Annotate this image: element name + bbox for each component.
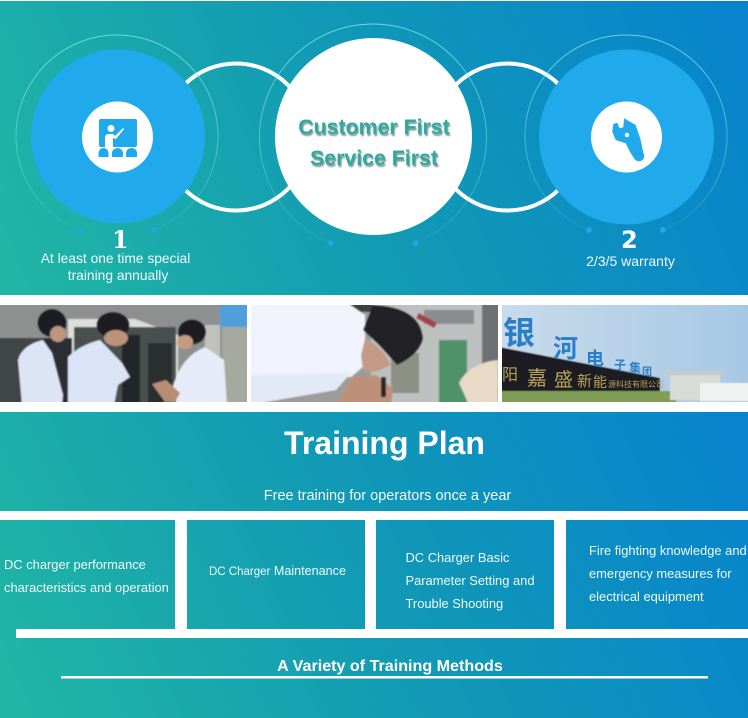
box text: performance: characteristics and operation xyxy=(4,580,169,595)
box text: fire fighting: Fire fighting knowledge and xyxy=(589,543,747,558)
thin orbit rings xyxy=(16,24,727,243)
icon: wrench xyxy=(591,102,662,172)
sign characters: 团 xyxy=(642,363,652,378)
gold slogan: 新 xyxy=(577,370,592,391)
box text: parameter setting: Trouble Shooting xyxy=(406,596,503,611)
blue circle right xyxy=(539,50,714,224)
text: training annually: training annually xyxy=(68,268,168,283)
gold slogan: 能 xyxy=(593,372,607,392)
number 1: 1 xyxy=(112,225,129,254)
sign characters: 子 xyxy=(614,356,626,373)
icon: training classroom xyxy=(82,102,153,172)
photo: technician wiring board xyxy=(251,305,498,402)
white frame xyxy=(0,511,748,520)
box text: parameter setting: Parameter Setting and xyxy=(406,573,534,588)
heading: Customer First Service First: Customer First xyxy=(298,115,450,139)
sign characters: 河 xyxy=(553,329,578,365)
blue circle left xyxy=(31,50,205,224)
worker right xyxy=(178,320,206,344)
gold slogan: 源科技有限公司 xyxy=(608,379,664,390)
box text: fire fighting: electrical equipment xyxy=(589,589,704,604)
worker middle xyxy=(96,312,130,338)
gold slogan: 盛 xyxy=(554,365,573,392)
connector arcs xyxy=(162,64,581,210)
orbit dots xyxy=(77,227,666,246)
sign characters: 电 xyxy=(586,345,604,371)
underline xyxy=(61,676,708,678)
gold slogan: 阳 xyxy=(502,361,518,385)
heading: Customer First Service First xyxy=(298,115,452,170)
text: training annually: At least one time special xyxy=(41,251,190,266)
heading: Customer First Service First: Service First xyxy=(310,146,438,170)
box text: maintenance: DC Charger Maintenance xyxy=(209,564,346,578)
photo: technicians at charger xyxy=(0,305,247,402)
sign characters xyxy=(503,308,652,378)
box text: parameter setting xyxy=(406,550,534,611)
heading: Training Plan: Training Plan xyxy=(284,425,485,461)
white centre circle xyxy=(275,38,472,235)
sign characters: 集 xyxy=(629,359,641,376)
gold slogan xyxy=(502,361,664,392)
number 2: 2 xyxy=(621,226,638,254)
text: training annually xyxy=(40,251,190,283)
sign characters: 银 xyxy=(503,308,535,354)
gold slogan: 嘉 xyxy=(527,362,547,391)
panel: customer service header xyxy=(0,1,748,295)
text: warranty: 2/3/5 warranty xyxy=(586,253,675,269)
worker left xyxy=(38,309,66,337)
box text: fire fighting xyxy=(589,543,747,604)
box text: fire fighting: emergency measures for xyxy=(589,566,732,581)
photo: company sign xyxy=(502,305,748,402)
subheading: free training: Free training for operators once a year xyxy=(264,488,511,504)
box text: performance xyxy=(4,557,169,595)
box text: parameter setting: DC Charger Basic xyxy=(406,550,509,565)
panel: training plan xyxy=(0,412,748,718)
heading: training methods: A Variety of Training Methods xyxy=(277,657,503,675)
box text: performance: DC charger performance xyxy=(4,557,146,572)
